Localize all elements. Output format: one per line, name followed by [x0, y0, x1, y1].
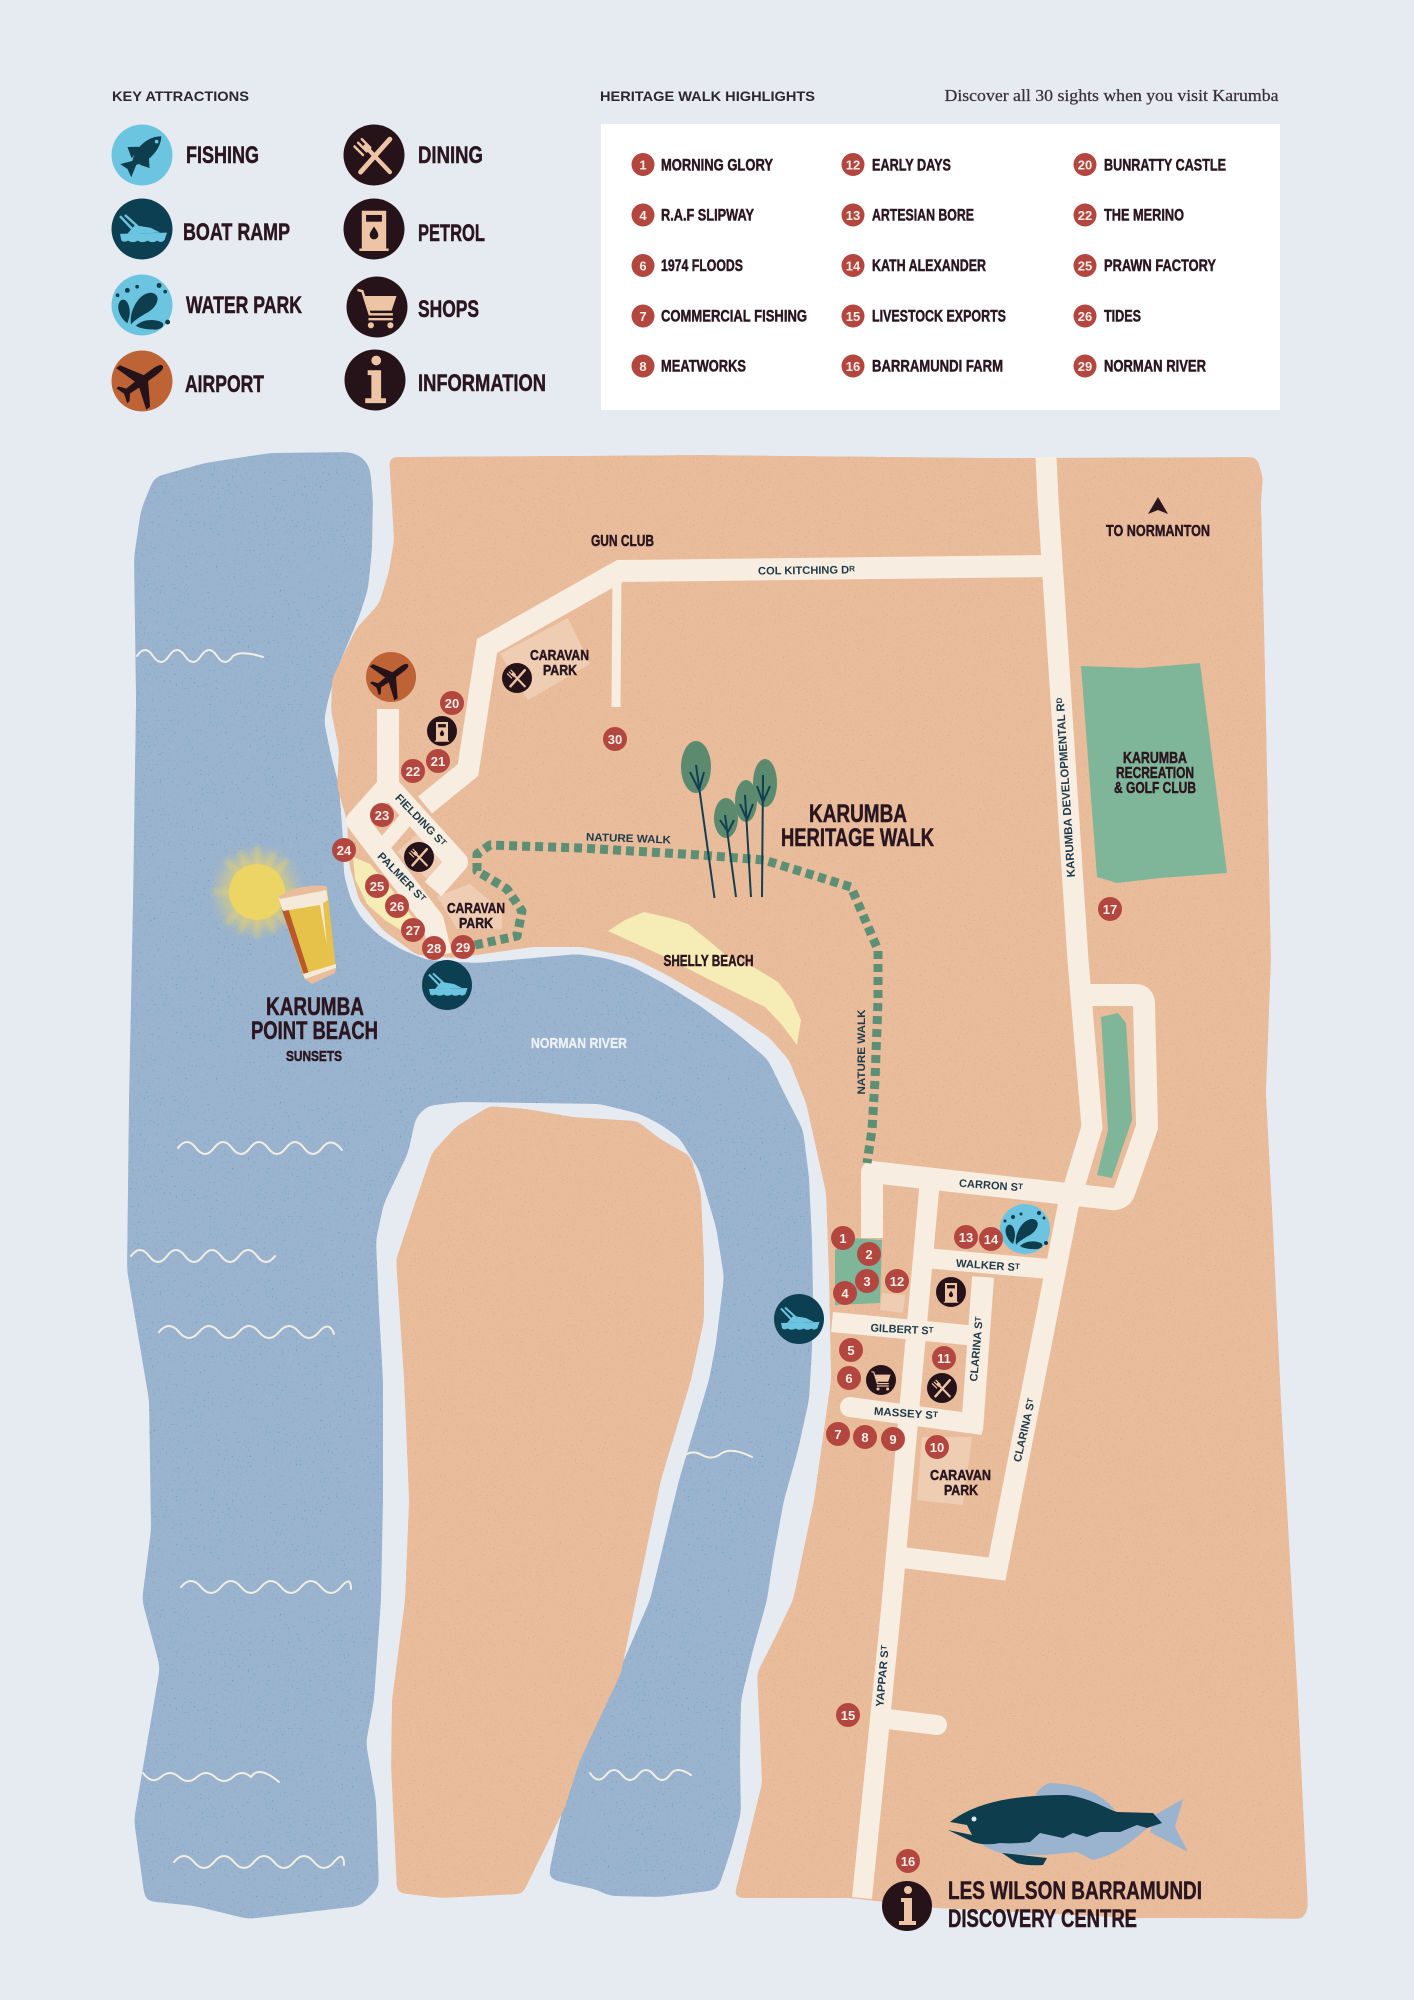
map: waves [131, 650, 752, 1868]
marker 24 [332, 838, 356, 862]
marker 22 [401, 759, 425, 783]
item 14: KATH ALEXANDER [872, 256, 986, 275]
item 29: NORMAN RIVER [1104, 356, 1206, 376]
label: karumba point beach: SUNSETS [286, 1048, 342, 1065]
label: caravan park north: PARK [543, 662, 577, 679]
label: col kitching drive: R [849, 564, 855, 573]
panel: heritage walk highlights [601, 124, 1280, 410]
item 26: TIDES [1104, 306, 1141, 326]
icon: shops on map [866, 1365, 896, 1395]
item 25: PRAWN FACTORY [1104, 256, 1216, 275]
marker 3 [855, 1269, 879, 1293]
icon: dining point [404, 842, 434, 872]
marker 15: 15 [841, 1708, 855, 1723]
icon: water park [112, 274, 172, 336]
label: dining: DINING [418, 142, 483, 169]
label: caravan park town: CARAVAN [930, 1467, 991, 1484]
label: clarina street inner: T [973, 1316, 983, 1322]
title: karumba heritage walk: KARUMBA [809, 800, 907, 828]
marker 30: 30 [608, 732, 622, 747]
item 1: MORNING GLORY [661, 156, 774, 174]
marker 1: 1 [839, 1231, 847, 1246]
marker 20 [440, 691, 464, 715]
label: massey street: T [933, 1410, 938, 1419]
item 14 [842, 254, 986, 277]
marker 16: 16 [901, 1854, 915, 1869]
label: yappar street: T [879, 1645, 889, 1651]
caravan and town blocks [397, 618, 972, 1505]
label: gilbert street: GILBERT S [870, 1322, 929, 1337]
marker 6: 6 [845, 1371, 853, 1386]
item 8 [632, 354, 746, 378]
marker 24: 24 [337, 843, 352, 858]
item 29: 29 [1078, 359, 1092, 374]
label: to normanton: TO NORMANTON [1106, 523, 1210, 540]
item 20 [1074, 153, 1226, 176]
item 12: EARLY DAYS [872, 156, 951, 174]
marker 25: 25 [370, 879, 384, 894]
map: island [392, 1107, 703, 1897]
item 25: 25 [1078, 258, 1092, 274]
marker 13 [954, 1225, 978, 1249]
item 22: 22 [1078, 208, 1092, 223]
item 16: 16 [846, 359, 860, 374]
marker 8: 8 [861, 1430, 869, 1445]
map number markers [332, 691, 1122, 1873]
marker 30 [603, 727, 627, 751]
label: golf club: KARUMBA [1123, 750, 1187, 767]
label: water park: WATER PARK [186, 292, 302, 319]
label: les wilson barramundi discovery centre: LES WILSON BARRAMUNDI [948, 1877, 1202, 1905]
label: shelly beach: SHELLY BEACH [664, 953, 754, 970]
icon: fishing [112, 124, 172, 186]
label: col kitching drive: COL KITCHING D [758, 564, 848, 578]
item 4: R.A.F SLIPWAY [661, 206, 754, 224]
marker 13: 13 [959, 1230, 973, 1245]
item 4: 4 [639, 208, 647, 223]
marker 2: 2 [865, 1247, 873, 1262]
marker 7 [826, 1422, 850, 1446]
marker 27: 27 [406, 923, 420, 938]
marker 28: 28 [427, 941, 441, 956]
item 26 [1074, 304, 1141, 328]
label: palmer street: T [418, 893, 428, 903]
label: caravan park town: PARK [944, 1482, 978, 1499]
item 7 [632, 304, 807, 328]
karumba point beach sand [353, 857, 423, 934]
marker 17 [1098, 897, 1122, 921]
icon: petrol town [936, 1277, 966, 1307]
nature walk path [475, 845, 878, 1163]
golf club green [1081, 663, 1227, 883]
label: information: INFORMATION [418, 370, 546, 397]
marker 3: 3 [863, 1274, 871, 1289]
item 29 [1074, 354, 1206, 378]
marker 9: 9 [889, 1432, 897, 1447]
heading: key attractions: KEY ATTRACTIONS [112, 88, 249, 104]
label: shops: SHOPS [418, 296, 479, 323]
icon: petrol [344, 198, 404, 260]
label: golf club: RECREATION [1116, 765, 1194, 782]
marker 2 [857, 1242, 881, 1266]
icon: beer glass [278, 885, 336, 984]
marker 10: 10 [930, 1440, 944, 1455]
marker 23: 23 [375, 808, 389, 823]
arrow: to normanton [1148, 497, 1168, 514]
tagline: Discover all 30 sights when you visit Karumba [944, 86, 1279, 105]
marker 1 [831, 1226, 855, 1250]
marker 4 [833, 1281, 857, 1305]
marker 21 [426, 749, 450, 773]
label: caravan park town [930, 1467, 991, 1499]
label: caravan park north: CARAVAN [530, 647, 589, 664]
item 7: 7 [639, 309, 647, 324]
map: water [128, 453, 812, 1918]
item 16: BARRAMUNDI FARM [872, 356, 1003, 376]
label: nature walk east: NATURE WALK [856, 1009, 868, 1094]
item 8: MEATWORKS [661, 356, 746, 376]
item 1: 1 [639, 158, 647, 172]
icon: dining caravan park [502, 663, 532, 693]
label: massey street: MASSEY S [874, 1406, 931, 1422]
label: les wilson barramundi discovery centre: DISCOVERY CENTRE [948, 1905, 1137, 1933]
label: palmer street: PALMER S [375, 851, 422, 899]
item 16 [842, 354, 1003, 378]
icon: dining town [927, 1373, 957, 1403]
item 12 [842, 153, 951, 176]
marker 5: 5 [847, 1343, 855, 1358]
icon: boat ramp [112, 198, 172, 260]
town park green [835, 1238, 882, 1305]
item 20: BUNRATTY CASTLE [1104, 156, 1226, 174]
marker 8 [853, 1425, 877, 1449]
label: petrol: PETROL [418, 220, 485, 247]
icon: petrol north [427, 716, 457, 746]
icon: boat ramp town [774, 1294, 824, 1344]
item 20: 20 [1078, 158, 1092, 172]
icon: water park on map [1000, 1204, 1050, 1254]
marker 25 [365, 874, 389, 898]
marker 14: 14 [984, 1232, 999, 1247]
item 15: LIVESTOCK EXPORTS [872, 306, 1006, 326]
label: clarina street outer: CLARINA S [1012, 1403, 1037, 1463]
marker 28 [422, 936, 446, 960]
label: les wilson barramundi discovery centre [948, 1877, 1202, 1933]
marker 12: 12 [890, 1274, 904, 1289]
label: clarina street inner: CLARINA S [968, 1322, 985, 1382]
marker 23 [370, 803, 394, 827]
marker 10 [925, 1435, 949, 1459]
item 14: 14 [846, 258, 861, 274]
title: karumba heritage walk: HERITAGE WALK [781, 824, 934, 852]
item 25 [1074, 254, 1216, 277]
shelly beach sand [608, 912, 801, 1045]
item 22: THE MERINO [1104, 206, 1184, 224]
marker 7: 7 [834, 1427, 842, 1442]
label: fielding street: T [438, 837, 448, 847]
label: karumba developmental road: KARUMBA DEVELOPMENTAL R [1055, 702, 1078, 878]
marker 27 [401, 918, 425, 942]
label: caravan park point [447, 900, 505, 932]
label: clarina street outer: T [1025, 1397, 1035, 1404]
marker 29 [451, 935, 475, 959]
icon: shops [346, 276, 408, 338]
item 1 [632, 153, 774, 176]
icon: boat ramp point [422, 960, 472, 1010]
label: caravan park north [530, 647, 589, 679]
marker 26: 26 [390, 899, 404, 914]
marker 26 [385, 894, 409, 918]
label: karumba point beach: POINT BEACH [251, 1017, 378, 1045]
icon: information centre [882, 1881, 932, 1931]
marker 15 [836, 1703, 860, 1727]
item 4 [632, 204, 754, 226]
item 26: 26 [1078, 309, 1092, 324]
label: karumba point beach: KARUMBA [266, 993, 364, 1021]
item 13 [842, 204, 974, 226]
item 6: 6 [639, 258, 647, 274]
label: carron street: T [1018, 1182, 1023, 1191]
icon: airport [107, 345, 178, 416]
item 7: COMMERCIAL FISHING [661, 306, 807, 326]
item 6: 1974 FLOODS [661, 256, 743, 275]
marker 29: 29 [456, 940, 470, 955]
item 6 [632, 254, 743, 277]
marker 11 [932, 1346, 956, 1370]
label: carron street: CARRON S [959, 1178, 1018, 1194]
label: airport: AIRPORT [185, 371, 264, 398]
label: gun club: GUN CLUB [591, 533, 654, 550]
sun [213, 846, 301, 938]
map: roads [357, 457, 1147, 1898]
item 22 [1074, 204, 1184, 226]
label: golf club: & GOLF CLUB [1114, 780, 1196, 797]
label: yappar street: YAPPAR S [874, 1652, 891, 1707]
label: golf club [1114, 750, 1196, 797]
label: walker street: T [1015, 1262, 1020, 1271]
marker 12 [885, 1269, 909, 1293]
marker 9 [881, 1427, 905, 1451]
label: caravan park point: CARAVAN [447, 900, 505, 917]
item 13: ARTESIAN BORE [872, 206, 974, 224]
loop park green [1097, 1013, 1132, 1178]
icon: dining [344, 124, 404, 186]
item 8: 8 [639, 359, 647, 374]
icon: information [344, 350, 406, 410]
illustration: barramundi fish [948, 1783, 1188, 1865]
heading: heritage walk highlights: HERITAGE WALK HIGHLIGHTS [600, 88, 815, 104]
legend: key attractions [107, 124, 546, 416]
title: karumba heritage walk [781, 800, 934, 852]
label: walker street: WALKER S [956, 1258, 1014, 1274]
icon: airport on map [362, 648, 420, 706]
item 15: 15 [846, 309, 860, 324]
item 12: 12 [846, 158, 860, 172]
marker 17: 17 [1103, 902, 1117, 917]
marker 21: 21 [431, 754, 445, 769]
label: nature walk west: NATURE WALK [586, 832, 671, 846]
label: boat ramp: BOAT RAMP [183, 219, 290, 246]
item 15 [842, 304, 1006, 328]
item 13: 13 [846, 208, 860, 223]
label: fishing: FISHING [186, 142, 259, 169]
label: karumba point beach [251, 993, 378, 1065]
marker 11: 11 [937, 1351, 951, 1366]
marker 22: 22 [406, 764, 420, 779]
marker 16 [896, 1849, 920, 1873]
label: caravan park point: PARK [459, 915, 493, 932]
map: mainland [332, 456, 1307, 1918]
label: fielding street: FIELDING S [392, 792, 444, 845]
label: gilbert street: T [928, 1325, 934, 1335]
marker 5 [839, 1338, 863, 1362]
label: karumba developmental road: D [1055, 697, 1064, 704]
trees [681, 741, 777, 898]
marker 14 [979, 1227, 1003, 1251]
marker 20: 20 [445, 696, 459, 711]
label: norman river: NORMAN RIVER [531, 1035, 627, 1052]
marker 4: 4 [841, 1286, 849, 1301]
marker 6 [837, 1366, 861, 1390]
